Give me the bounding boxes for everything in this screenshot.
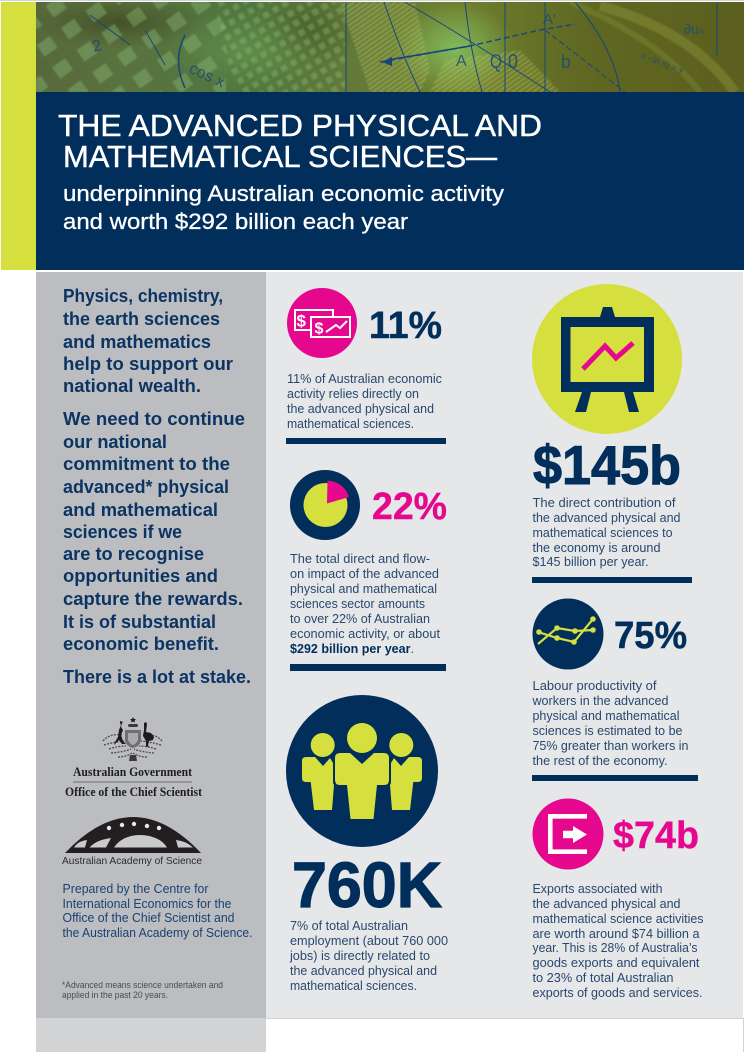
sidebar commitment text: are to recognise <box>63 543 204 564</box>
description: mathematical sciences to <box>532 525 672 540</box>
sidebar commitment text: opportunities and <box>63 565 218 586</box>
sidebar closing statement: There is a lot at stake. <box>63 666 251 687</box>
description: the advanced physical and <box>290 963 437 978</box>
description: 75% greater than workers in <box>532 738 688 753</box>
description: mathematical science activities <box>532 911 704 926</box>
description: goods exports and equivalent <box>532 955 700 970</box>
description: activity relies directly on <box>287 386 419 401</box>
description: the advanced physical and <box>287 401 434 416</box>
description: exports of goods and services. <box>532 985 702 1000</box>
sidebar commitment text <box>63 408 245 654</box>
description: sciences sector amounts <box>290 596 425 611</box>
description: economic activity, or about <box>290 626 440 641</box>
title: MATHEMATICAL SCIENCES— <box>63 140 497 174</box>
description: $145 billion per year. <box>532 554 648 569</box>
description: on impact of the advanced <box>290 566 439 581</box>
header photo: mathematical collage: 2 <box>91 37 104 56</box>
stat: 11% <box>287 288 442 431</box>
subtitle <box>63 181 504 234</box>
subtitle: and worth $292 billion each year <box>63 209 408 234</box>
description <box>532 881 704 1000</box>
sidebar commitment text: It is of substantial <box>63 611 216 632</box>
sidebar commitment text: advanced* physical <box>63 476 229 497</box>
icon: three people <box>286 695 438 847</box>
sidebar intro text: Physics, chemistry, <box>63 285 223 306</box>
description: the advanced physical and <box>532 896 680 911</box>
description: Labour productivity of <box>532 678 657 693</box>
figure: 11%: 11% <box>369 305 442 347</box>
description: the rest of the economy. <box>532 753 668 768</box>
figure: 760K: 760K <box>292 849 442 921</box>
description: $292 billion per year. <box>290 641 414 656</box>
description <box>532 495 680 569</box>
icon: export arrow <box>532 798 604 870</box>
sidebar commitment text: economic benefit. <box>63 633 219 654</box>
footnote: applied in the past 20 years. <box>62 990 168 1001</box>
header photo: mathematical collage: n −ln n) = y <box>639 50 686 75</box>
description <box>532 678 688 768</box>
subtitle: underpinning Australian economic activity <box>63 181 504 206</box>
header photo: mathematical collage: A' <box>543 11 556 28</box>
prepared-by note: Office of the Chief Scientist and <box>62 911 235 925</box>
description: the economy is around <box>532 540 660 555</box>
description: to over 22% of Australian <box>290 611 430 626</box>
sidebar commitment text: and mathematical <box>63 499 218 520</box>
icon: Australian coat of arms <box>103 717 162 761</box>
title <box>58 109 542 174</box>
figure: 75%: 75% <box>614 615 687 657</box>
footnote: *Advanced means science undertaken and <box>62 980 223 991</box>
header photo: mathematical collage: cos x <box>186 60 227 91</box>
description <box>289 918 448 993</box>
sidebar intro text: help to support our <box>63 353 233 374</box>
description: mathematical sciences. <box>290 978 417 993</box>
header photo: mathematical collage: Q <box>490 51 502 73</box>
description: to 23% of total Australian <box>532 970 674 985</box>
logo text: Australian Government: Office of the Chief Scientist <box>65 785 203 799</box>
header photo: mathematical collage: 0 <box>508 51 518 73</box>
icon: money and trend: $ <box>314 320 324 338</box>
stat: $74b <box>532 798 704 1000</box>
prepared-by note <box>62 882 252 940</box>
description <box>287 371 442 431</box>
description: 7% of total Australian <box>290 918 408 933</box>
lime accent bar <box>1 2 36 270</box>
sidebar commitment text: commitment to the <box>63 453 230 474</box>
icon: money and trend <box>287 288 357 358</box>
panel: sidebar footer strip <box>36 1018 266 1052</box>
logo: Australian Academy of Science dome <box>62 817 202 867</box>
sidebar commitment text: our national <box>63 431 167 452</box>
sidebar commitment text: capture the rewards. <box>63 588 243 609</box>
sidebar commitment text: We need to continue <box>63 408 245 429</box>
description: Exports associated with <box>532 881 662 896</box>
stat: 760K <box>286 695 448 993</box>
icon: pie chart <box>290 470 360 540</box>
header photo: mathematical collage: ∂uₙ <box>684 21 704 37</box>
header photo: mathematical collage: b <box>561 52 571 72</box>
panel: right statistics <box>266 272 743 1018</box>
prepared-by note: International Economics for the <box>62 897 232 911</box>
description: The total direct and flow- <box>290 551 430 566</box>
description: mathematical sciences. <box>287 416 414 431</box>
logo: Australian Academy of Science dome: Australian Academy of Science <box>62 855 202 867</box>
figure: $74b: $74b <box>613 815 699 857</box>
description: jobs) is directly related to <box>289 948 430 963</box>
description: 11% of Australian economic <box>287 371 442 386</box>
sidebar intro text: national wealth. <box>63 375 201 396</box>
logo text: Australian Government <box>65 765 203 799</box>
description: The direct contribution of <box>532 495 676 510</box>
stat: $145b <box>532 284 682 569</box>
description: workers in the advanced <box>532 693 668 708</box>
description: the advanced physical and <box>532 510 680 525</box>
figure: 22%: 22% <box>372 486 447 528</box>
description: physical and mathematical <box>290 581 437 596</box>
sidebar intro text: the earth sciences <box>63 308 220 329</box>
prepared-by note: the Australian Academy of Science. <box>62 926 252 940</box>
description: are worth around $74 billion a <box>532 926 700 941</box>
sidebar intro text <box>63 285 233 396</box>
description: physical and mathematical <box>532 708 680 723</box>
header band <box>36 92 744 270</box>
sidebar commitment text: sciences if we <box>63 521 182 542</box>
prepared-by note: Prepared by the Centre for <box>62 882 208 896</box>
footnote <box>62 980 223 1001</box>
description: employment (about 760 000 <box>290 933 448 948</box>
icon: money and trend: $ <box>296 312 306 330</box>
sidebar intro text: and mathematics <box>63 331 211 352</box>
description <box>290 551 440 656</box>
header photo: mathematical collage <box>35 0 744 94</box>
stat: 22% <box>290 470 447 656</box>
figure: $145b: $145b <box>533 434 681 496</box>
stat: 75% <box>532 598 688 768</box>
icon: crossing line chart <box>532 598 604 670</box>
header photo: mathematical collage: A <box>456 53 467 70</box>
title: THE ADVANCED PHYSICAL AND <box>58 109 542 143</box>
icon: presentation easel <box>532 284 682 434</box>
description: sciences is estimated to be <box>532 723 682 738</box>
panel: left sidebar <box>36 272 266 1018</box>
logo text: Australian Government: Australian Government <box>73 765 193 779</box>
description: year. This is 28% of Australia’s <box>532 940 698 955</box>
